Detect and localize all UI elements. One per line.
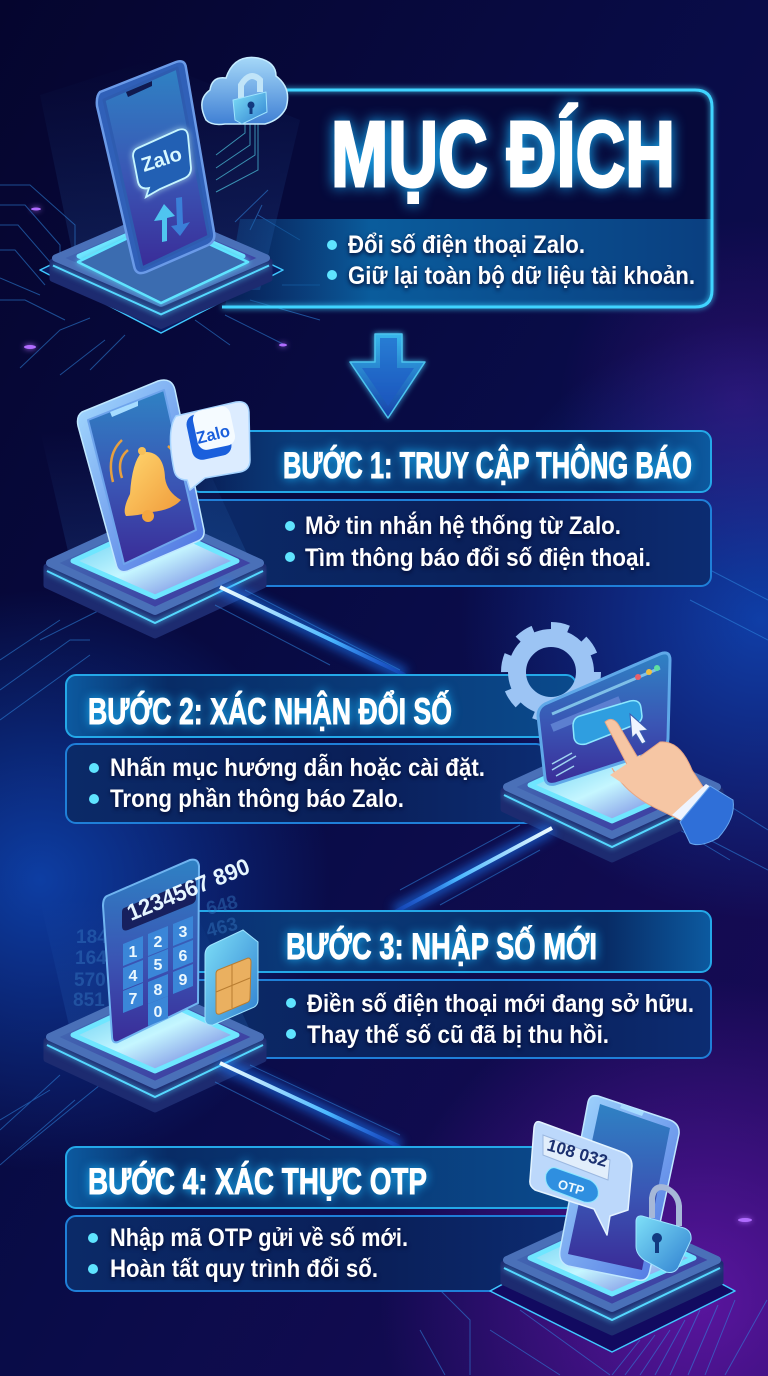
panel: buoc 1 bbox=[190, 431, 711, 586]
keypad keys: 6 bbox=[179, 948, 188, 965]
icon: cloud with lock bbox=[202, 57, 288, 124]
keypad keys: 2 bbox=[154, 934, 163, 951]
illustration: otp phone and lock bbox=[490, 1096, 735, 1352]
panel: buoc 3 bbox=[190, 911, 711, 1058]
bullets: buoc 2: Nhấn mục hướng dẫn hoặc cài đặt. bbox=[110, 752, 485, 782]
arrow bbox=[350, 334, 425, 418]
icon: zalo logo: Zalo bbox=[139, 143, 185, 177]
bullets: buoc 1: Tìm thông báo đổi số điện thoại. bbox=[305, 544, 651, 572]
bullets: buoc 2: Trong phần thông báo Zalo. bbox=[110, 785, 404, 813]
keypad keys: 7 bbox=[129, 991, 138, 1008]
faint numbers: 570 bbox=[74, 970, 106, 991]
keypad keys: 8 bbox=[154, 982, 163, 999]
keypad keys: 3 bbox=[179, 924, 188, 941]
keypad keys bbox=[123, 916, 193, 1026]
circuit traces to cloud bbox=[216, 122, 258, 192]
panel: muc dich bbox=[222, 90, 712, 307]
icon: zalo bubble: Zalo bbox=[194, 421, 232, 448]
panel: buoc 2 bbox=[66, 675, 576, 823]
icon: otp bubble bbox=[530, 1122, 632, 1235]
heading: buoc 2: BƯỚC 2: XÁC NHẬN ĐỔI SỐ bbox=[88, 689, 452, 732]
illustration: browser, gear and hand bbox=[504, 628, 733, 859]
icon: sim card bbox=[205, 930, 258, 1025]
bullets: muc dich: Đổi số điện thoại Zalo. bbox=[348, 231, 585, 259]
icon: otp bubble: 108 032 bbox=[545, 1136, 610, 1171]
bullets: buoc 4: Hoàn tất quy trình đổi số. bbox=[110, 1255, 378, 1283]
illustration: keypad and sim bbox=[40, 853, 263, 1109]
connector beam 1 bbox=[215, 587, 405, 675]
keypad keys: 9 bbox=[179, 972, 188, 989]
bullets: buoc 3: Thay thế số cũ đã bị thu hồi. bbox=[307, 1021, 609, 1049]
icon: phone bbox=[78, 380, 204, 572]
bullets: buoc 1: Mở tin nhắn hệ thống từ Zalo. bbox=[305, 510, 621, 540]
icon: zalo logo bbox=[133, 129, 191, 197]
keypad keys: 5 bbox=[154, 957, 163, 974]
bullets: buoc 4: Nhập mã OTP gửi về số mới. bbox=[110, 1224, 408, 1252]
icon: bell bbox=[111, 440, 181, 522]
otp button: OTP bbox=[556, 1176, 586, 1198]
icon: zalo bubble bbox=[170, 402, 250, 490]
icon: keypad bbox=[103, 853, 253, 1042]
faint numbers: 184 bbox=[76, 927, 108, 948]
browser button bbox=[573, 701, 642, 744]
bullets: buoc 4 bbox=[88, 1224, 408, 1283]
keypad keys: 4 bbox=[129, 968, 138, 985]
connector beam 3 bbox=[215, 1063, 400, 1147]
bullets: buoc 3: Điền số điện thoại mới đang sở hữu. bbox=[307, 990, 694, 1018]
icon: phone bbox=[560, 1096, 679, 1280]
icon: swap arrows bbox=[154, 197, 190, 242]
sparks bbox=[24, 205, 752, 1222]
bullets: buoc 3 bbox=[286, 990, 694, 1049]
phone number: 1234567 890 bbox=[123, 853, 253, 926]
icon: browser window bbox=[538, 653, 670, 784]
faint numbers bbox=[73, 892, 240, 1011]
icon: hand bbox=[605, 719, 733, 845]
faint numbers: 164 bbox=[75, 948, 107, 969]
heading: buoc 3: BƯỚC 3: NHẬP SỐ MỚI bbox=[286, 925, 597, 967]
faint numbers: 851 bbox=[73, 990, 105, 1011]
connector beam 2 bbox=[395, 825, 552, 912]
illustration: phone with bell and zalo bubble bbox=[40, 380, 263, 635]
faint numbers: 648 bbox=[204, 892, 240, 920]
bullets: muc dich: Giữ lại toàn bộ dữ liệu tài khoản. bbox=[348, 262, 695, 290]
bullets: buoc 2 bbox=[89, 752, 485, 813]
keypad keys: 0 bbox=[154, 1004, 163, 1021]
panel: buoc 4 bbox=[66, 1147, 576, 1291]
bullets: buoc 1 bbox=[285, 510, 651, 572]
bullets: muc dich bbox=[327, 231, 695, 290]
icon: gear bbox=[507, 628, 595, 716]
icon: padlock bbox=[636, 1187, 691, 1272]
icon: phone bbox=[97, 61, 214, 273]
faint numbers: 463 bbox=[204, 914, 240, 942]
keypad keys: 1 bbox=[129, 944, 138, 961]
illustration: phone on platform with cloud lock bbox=[40, 57, 300, 333]
heading: buoc 4: BƯỚC 4: XÁC THỰC OTP bbox=[88, 1160, 427, 1202]
